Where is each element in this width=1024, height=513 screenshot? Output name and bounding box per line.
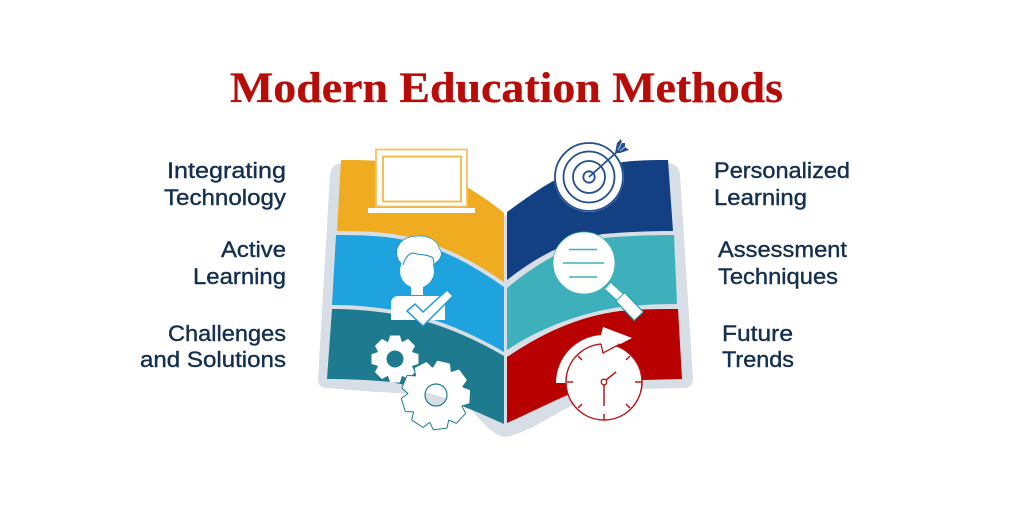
icon: laptop [368,150,475,213]
page band: light teal [507,235,677,350]
left labels [140,158,286,372]
label: Active Learning [193,237,286,289]
label: Integrating Technology: Integrating [167,158,286,183]
label: Future Trends: Future [722,321,793,346]
page band: yellow [337,160,504,282]
label: Personalized Learning: Personalized [714,158,850,183]
label: Challenges and Solutions [140,321,286,372]
label: Future Trends: Trends [722,347,794,372]
label: Active Learning: Learning [193,264,286,289]
icon: small gear [372,336,418,382]
page band: blue [332,235,504,352]
label: Personalized Learning [714,158,850,210]
label: Integrating Technology [164,158,286,210]
page band: navy [507,160,673,280]
icon: large gear [402,361,469,429]
label: Challenges and Solutions: Challenges [168,321,286,346]
label: Integrating Technology: Technology [164,185,286,210]
label: Personalized Learning: Learning [714,185,807,210]
page band: red [507,309,682,423]
icon: clock with arrow [556,327,642,420]
book cover [318,163,693,437]
page band: dark teal [327,309,504,424]
right labels [714,158,850,372]
icon: person with check mark [391,236,453,326]
icon: magnifying glass [553,232,639,316]
label: Challenges and Solutions: and Solutions [140,347,286,372]
label: Active Learning: Active [221,237,286,262]
title: Modern Education Methods [230,65,783,112]
label: Future Trends [722,321,794,372]
label: Assessment Techniques [718,237,847,289]
label: Assessment Techniques: Techniques [718,264,838,289]
label: Assessment Techniques: Assessment [718,237,847,262]
icon: target with arrow [554,139,629,212]
open book [318,160,693,437]
